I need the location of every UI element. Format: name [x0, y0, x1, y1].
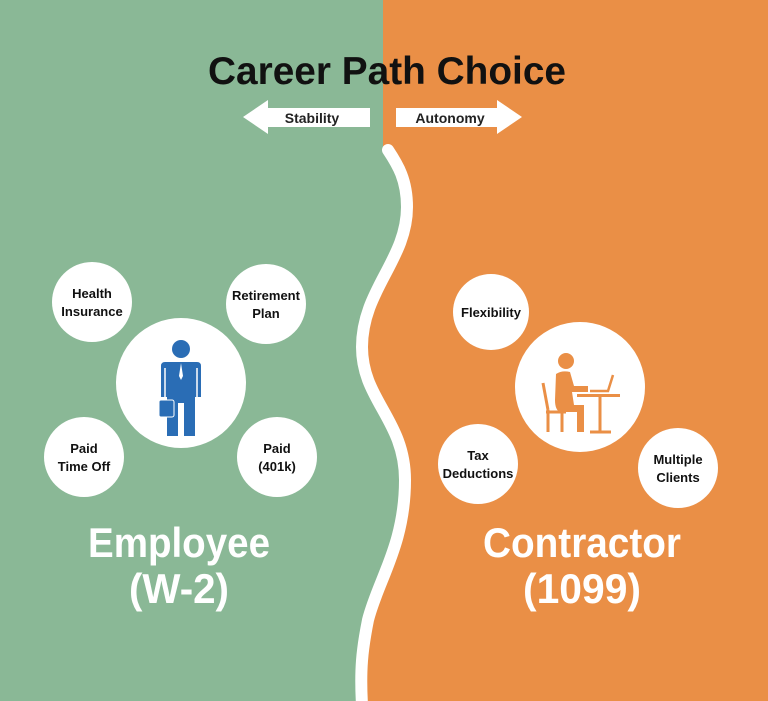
bubble: multiple clients: Multiple: [653, 452, 703, 467]
bubble: multiple clients: [638, 428, 718, 508]
panel: contractor background: [361, 0, 768, 701]
bubble: tax deductions: [438, 424, 518, 504]
bubble: paid 401k: [237, 417, 317, 497]
bubble: paid 401k: (401k): [258, 459, 296, 474]
bubble: flexibility: Flexibility: [461, 305, 522, 320]
arrow: stability: [243, 100, 370, 134]
heading: contractor: (1099): [523, 565, 641, 612]
bubble: multiple clients: Clients: [656, 470, 700, 485]
arrow: autonomy: Autonomy: [415, 110, 485, 126]
bubble: paid time off: Time Off: [58, 459, 111, 474]
arrow: stability: Stability: [285, 110, 339, 126]
bubble: paid time off: [44, 417, 124, 497]
bubble: retirement plan: Retirement: [232, 288, 301, 303]
icon: employee with briefcase: [116, 318, 246, 448]
heading: contractor: [483, 519, 681, 612]
heading: employee: (W-2): [129, 565, 229, 612]
bubble: retirement plan: Plan: [252, 306, 280, 321]
title: Career Path Choice: [208, 50, 566, 93]
bubble: flexibility: [453, 274, 529, 350]
bubble: tax deductions: Deductions: [443, 466, 513, 481]
heading: employee: [88, 519, 270, 612]
divider: wavy line: [361, 150, 407, 701]
bubble: paid time off: Paid: [70, 441, 98, 456]
heading: contractor: Contractor: [483, 519, 681, 566]
bubble: tax deductions: Tax: [467, 448, 489, 463]
bubble: health insurance: Health: [72, 286, 112, 301]
bubble: health insurance: [52, 262, 132, 342]
heading: employee: Employee: [88, 519, 270, 566]
bubble: paid 401k: Paid: [263, 441, 291, 456]
bubble: health insurance: Insurance: [61, 304, 123, 319]
bubble: retirement plan: [226, 264, 306, 344]
arrow: autonomy: [396, 100, 522, 134]
icon: contractor at desk: [515, 322, 645, 452]
